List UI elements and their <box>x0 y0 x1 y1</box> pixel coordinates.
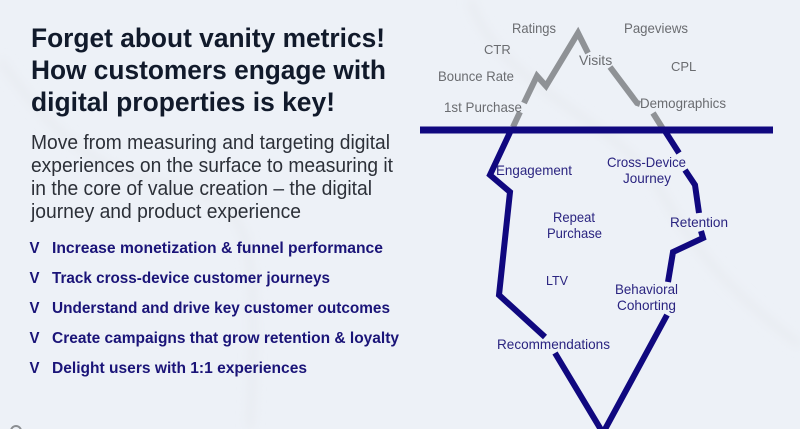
label: Behavioral Cohorting: Behavioral <box>615 281 678 297</box>
title: Forget about vanity metrics! <box>31 23 385 53</box>
title <box>31 23 386 117</box>
body text <box>30 132 393 223</box>
iceberg diagram <box>420 20 773 429</box>
item: journeys: V <box>30 270 40 287</box>
item: monetization: V <box>30 240 40 257</box>
item: campaigns: Create campaigns that grow retention & loyalty <box>52 330 399 347</box>
label: Cross-Device Journey <box>607 154 686 186</box>
icon: corner circle <box>11 426 21 429</box>
label: LTV: LTV <box>546 274 569 288</box>
label: Cross-Device Journey: Journey <box>623 170 671 186</box>
iceberg tip outline <box>513 33 663 129</box>
label: Repeat Purchase: Repeat <box>553 209 595 225</box>
label: Ratings: Ratings <box>512 20 556 36</box>
body text: journey and product experience <box>30 201 301 223</box>
core metrics <box>496 154 728 352</box>
item: delight: Delight users with 1:1 experiences <box>52 360 307 377</box>
label: Visits: Visits <box>579 52 612 68</box>
checklist <box>30 240 399 377</box>
item: monetization: Increase monetization & funnel performance <box>52 240 383 257</box>
label: Engagement: Engagement <box>496 162 572 178</box>
iceberg underwater outline <box>490 128 703 429</box>
title: digital properties is key! <box>31 87 335 117</box>
label: Behavioral Cohorting: Cohorting <box>617 297 676 313</box>
body text: Move from measuring and targeting digital <box>31 132 390 154</box>
label: CPL: CPL <box>671 59 696 74</box>
surface metrics <box>438 20 726 115</box>
label: Behavioral Cohorting <box>615 281 678 313</box>
label: 1st Purchase: 1st Purchase <box>444 99 522 115</box>
body text: in the core of value creation – the digital <box>31 178 372 200</box>
label: Demographics: Demographics <box>640 95 726 111</box>
waterline <box>420 126 773 134</box>
label: CTR: CTR <box>484 42 511 57</box>
item: campaigns: V <box>30 330 40 347</box>
label: Recommendations: Recommendations <box>497 336 610 352</box>
label: Retention: Retention <box>670 214 728 230</box>
item: journeys: Track cross-device customer journeys <box>52 270 330 287</box>
label: Repeat Purchase <box>547 209 602 241</box>
label: Bounce Rate: Bounce Rate <box>438 68 514 84</box>
body text: experiences on the surface to measuring it <box>31 155 393 177</box>
item: outcomes: V <box>30 300 40 317</box>
label: Repeat Purchase: Purchase <box>547 225 602 241</box>
title: How customers engage with <box>31 55 386 85</box>
item: delight: V <box>30 360 40 377</box>
label: Cross-Device Journey: Cross-Device <box>607 154 686 170</box>
label: Pageviews: Pageviews <box>624 20 688 36</box>
item: outcomes: Understand and drive key customer outcomes <box>52 300 390 317</box>
